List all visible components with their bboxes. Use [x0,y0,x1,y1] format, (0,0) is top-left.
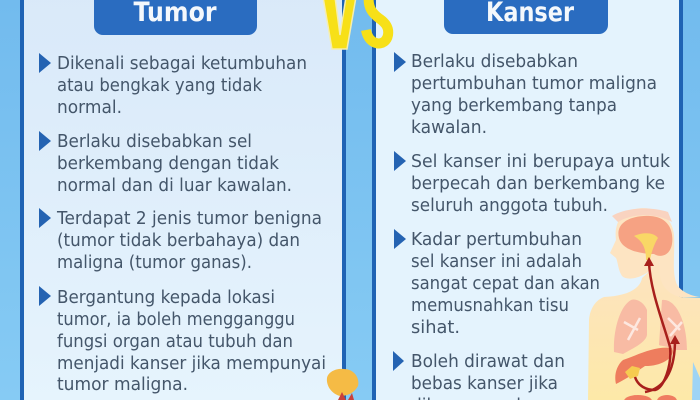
bullet 1: yang berkembang tanpa [411,96,617,116]
bullet 4: bebas kanser jika [411,374,558,394]
illustration: tumor cell [327,369,358,400]
bullet 3: memusnahkan tisu [411,296,569,316]
bullet 2: normal dan di luar kawalan. [57,176,292,196]
bullet 1: kawalan. [411,118,487,138]
bullet 1 [394,52,657,138]
kanser bullet list [393,52,671,400]
bullet 1: atau bengkak yang tidak [57,76,263,96]
bullet 1: pertumbuhan tumor maligna [411,74,657,94]
bullet 2 [394,151,671,216]
bullet 3: Terdapat 2 jenis tumor benigna [56,209,322,229]
bullet 1: Dikenali sebagai ketumbuhan [57,54,307,74]
primary tumor spot [625,366,640,379]
bullet 3: sihat. [411,318,460,338]
bullet 2 [39,131,292,196]
bullet 2: berkembang dengan tidak [57,154,280,174]
bullet 1: Berlaku disebabkan [411,52,578,72]
illustration: human body with organs [588,208,700,400]
S [366,0,388,43]
arm gap [692,362,700,400]
heading: Tumor [94,0,257,35]
body silhouette [610,208,700,297]
bullet 4 [393,351,565,400]
bullet 4: Bergantung kepada lokasi [57,288,275,308]
V [323,0,356,49]
hair [612,209,672,222]
bullet 3 [39,208,322,273]
bullet 4: tumor maligna. [57,375,188,395]
liver and stomach [615,348,673,384]
bullet 4: Boleh dirawat dan [411,352,565,372]
bullet 1 [39,53,307,118]
bullet 2: Sel kanser ini berupaya untuk [411,152,671,172]
brain [618,216,672,256]
metastasis arrows [635,262,670,390]
bullet 4: menjadi kanser jika mempunyai [57,354,326,374]
lower organ [624,395,652,400]
bullet 2: Berlaku disebabkan sel [57,132,252,152]
bullet 2: seluruh anggota tubuh. [411,196,608,216]
brain stem [634,233,658,260]
tumor bullet list [39,53,326,395]
bullet 3: Kadar pertumbuhan [411,230,582,250]
panel: tumor [22,0,344,400]
bullet 2: berpecah dan berkembang ke [411,174,665,194]
bullet 3: maligna (tumor ganas). [57,253,252,273]
panel: kanser [374,0,681,400]
lungs [614,299,687,354]
bullet 3: sel kanser ini adalah [411,252,582,272]
bullet 4 [39,286,326,395]
bullet 3: sangat cepat dan akan [411,274,600,294]
heading: Kanser [444,0,608,34]
bullet 4: fungsi organ atau tubuh dan [57,332,293,352]
bullet 1: normal. [57,98,122,118]
bullet 4: tumor, ia boleh mengganggu [57,310,295,330]
VS title [323,0,388,49]
bullet 3 [394,229,600,338]
bullet 3: (tumor tidak berbahaya) dan [57,231,300,251]
torso [588,262,700,400]
